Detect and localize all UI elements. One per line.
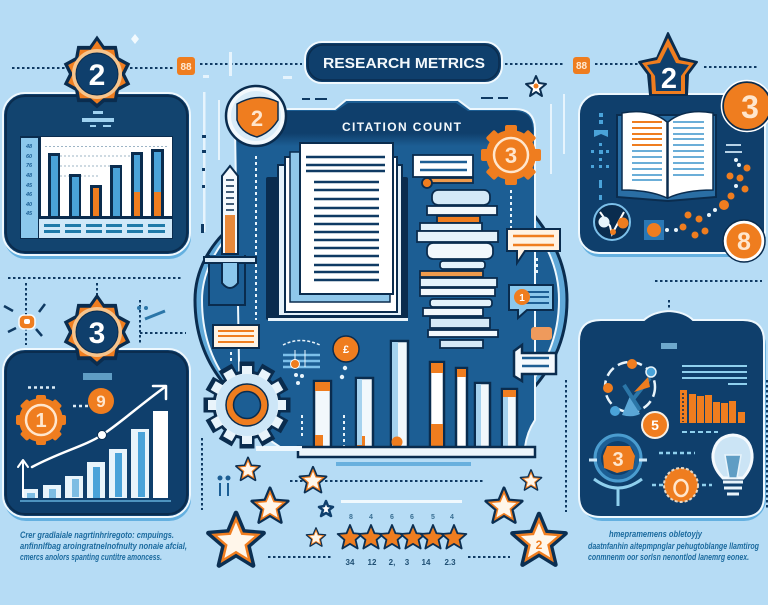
icon: badge 3 emblem: 3: [612, 449, 624, 471]
icon: small table: [283, 340, 320, 385]
axis labels: 45: [25, 183, 33, 189]
network dots: [644, 158, 750, 240]
icon: scales medallion: [594, 204, 630, 240]
panel heading mark: [661, 343, 677, 349]
icon: star badge 2: [639, 33, 697, 95]
text block: right caption: [588, 529, 759, 563]
title: [305, 42, 502, 83]
icon: orange tag right: 88: [576, 61, 587, 72]
rating numbers bottom: 2.3: [444, 558, 456, 567]
document stack: [266, 143, 408, 321]
icon: decorative stars: [208, 458, 566, 565]
callout: orange lines: [507, 229, 560, 263]
main blue panel: [235, 100, 535, 447]
tick marks: [201, 97, 508, 233]
icon: decorative stars: 2: [536, 538, 543, 552]
callout: blue lines: [514, 345, 556, 381]
callout: left note: [213, 325, 259, 348]
icon: orange symbol circle: £: [343, 344, 349, 356]
icon: orange gear 1: [16, 395, 66, 445]
left icon column: [591, 113, 609, 200]
icon: gear 3: [481, 125, 541, 185]
rating numbers bottom: 14: [422, 558, 431, 567]
icon: orange tag left: 88: [180, 62, 192, 73]
big circle backdrop: [195, 210, 567, 402]
axis labels: [25, 144, 33, 217]
callout: number 4: [509, 285, 553, 318]
title: RESEARCH METRICS: [323, 55, 485, 72]
rating numbers top: 6: [390, 514, 394, 521]
bar chart: six bars: [20, 136, 173, 239]
panel: insights: [579, 311, 766, 521]
icon: badge 3 left: [64, 294, 130, 366]
icon: circle 8: [723, 220, 765, 262]
axis labels: 60: [26, 154, 32, 160]
small orange pill: [531, 327, 552, 340]
rating numbers top: 5: [431, 514, 435, 521]
icon: circle 3: 3: [741, 89, 759, 125]
icon: circular gauge: [603, 359, 656, 416]
panel: citation count: [195, 100, 567, 466]
icon: circle 9: 9: [96, 392, 106, 411]
icon: orange cog: [664, 468, 698, 502]
rating numbers bottom: 2,: [389, 558, 395, 567]
icon: badge 3 emblem: [589, 435, 647, 506]
rating numbers top: 6: [410, 514, 414, 521]
icon: orange symbol circle: [333, 336, 359, 362]
callout: number 4: 1: [519, 293, 525, 304]
icon: star badge 2: 2: [661, 63, 677, 95]
icon: badge 2 centre: 2: [251, 106, 263, 131]
bar chart: orange bars: [680, 390, 745, 423]
rating numbers bottom: [346, 558, 456, 567]
bar chart: growth bars: [20, 411, 171, 502]
icon: light bulb: [713, 435, 752, 494]
icon: small star marker: [526, 76, 546, 96]
icon: orange node with rays: [4, 304, 45, 336]
text block: right caption: hmepramemens obletoyjy: [609, 529, 703, 540]
axis labels: 46: [25, 192, 33, 198]
icon: orange gear 1: 1: [35, 410, 47, 432]
bar details: [315, 342, 516, 448]
chart baseline: [256, 446, 535, 466]
rating numbers top: 4: [450, 514, 454, 521]
icon: badge 2 centre: [226, 86, 286, 146]
icon: circle 5: 5: [651, 417, 659, 433]
rating: six orange stars: [338, 525, 466, 549]
icon: circle 8: 8: [737, 228, 751, 256]
icon: gear 3: 3: [505, 143, 517, 168]
rating numbers bottom: 3: [405, 558, 410, 567]
rating divider: [341, 500, 462, 503]
rating numbers top: [349, 514, 454, 521]
panel heading marks: [82, 111, 114, 127]
text lines: [682, 366, 747, 384]
text block: left caption: Crer gradlaiale nagrtinhriregoto: cmpuings.: [20, 530, 174, 541]
axis labels: 40: [25, 202, 32, 208]
icon: thermometer pen: [204, 166, 256, 305]
axis labels: 48: [25, 144, 33, 150]
icon: circle 5: [642, 412, 668, 438]
text block: left caption: anfinnlfbag aroingratnelnofnulty nonaie afcial,: [20, 541, 187, 552]
axis labels: 48: [25, 173, 33, 179]
axis labels: 45: [25, 211, 33, 217]
small side marks: [203, 52, 565, 232]
icon: circle 9: [88, 388, 114, 414]
text block: left caption: [20, 530, 187, 563]
icon: orange tag right: [573, 57, 590, 74]
icon: badge 2 left: 2: [89, 59, 105, 92]
icon: badge 3 left: 3: [89, 317, 105, 350]
rating numbers bottom: 12: [368, 558, 377, 567]
dashed panel guides: [231, 156, 537, 446]
icon: open book: [617, 112, 716, 201]
panel: left growth chart: [3, 349, 191, 521]
icon: side rating scale: [218, 476, 230, 496]
dashed links: [652, 453, 712, 485]
panel heading: CITATION COUNT: [342, 120, 462, 134]
icon: book stack: [413, 155, 498, 348]
axis labels: 76: [26, 163, 33, 169]
rating numbers bottom: 34: [346, 558, 355, 567]
rating numbers top: 8: [349, 514, 353, 521]
rating numbers top: 4: [369, 514, 373, 521]
icon: white gear: [206, 364, 288, 446]
arrow: growth trend: [18, 386, 166, 497]
panel: left chart: [3, 93, 191, 259]
panel: open book: [579, 94, 766, 257]
icon: orange tag left: [177, 57, 195, 75]
bar chart: citation bars: [314, 341, 517, 448]
text block: left caption: cmercs anolors spanting cuntitre amoncess.: [20, 552, 162, 563]
panel heading mark: [83, 373, 112, 380]
icon: small sparkle: [131, 34, 139, 44]
icon: badge 2 left: [64, 36, 130, 108]
icon: circle 3: [722, 80, 768, 132]
icon: small pointer arrow: [137, 306, 165, 319]
